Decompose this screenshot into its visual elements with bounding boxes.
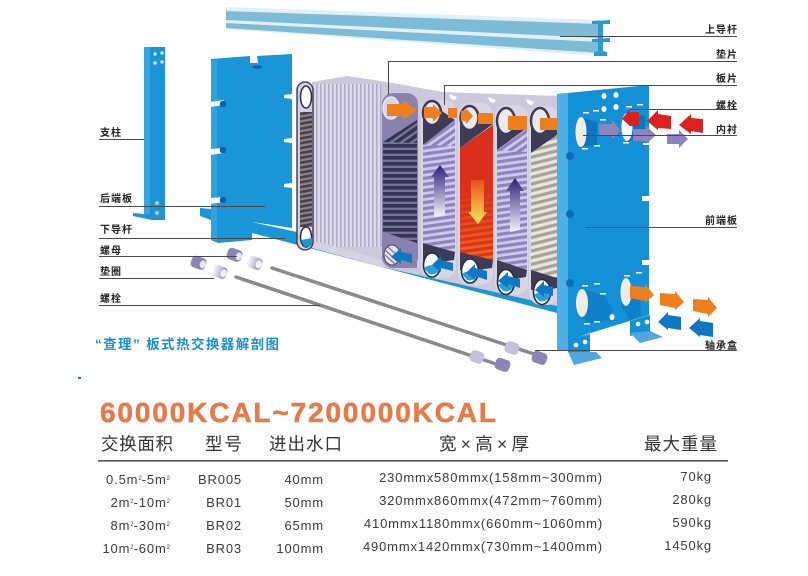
table row 3 bbox=[111, 515, 712, 533]
tie bolts bbox=[236, 268, 549, 373]
table row 1: 2 bbox=[138, 476, 142, 482]
labels left: 螺栓 bbox=[100, 292, 122, 305]
table header: 宽 × 高 × 厚 bbox=[439, 434, 529, 454]
table row 4 bbox=[102, 538, 712, 556]
labels left: 螺母 bbox=[100, 244, 122, 257]
table row 4: 490mmx1420mmx(730mm~1400mm) bbox=[363, 539, 603, 554]
table row 1: -5m bbox=[142, 472, 167, 487]
labels right: 前端板 bbox=[705, 214, 738, 227]
table row 4: 2 bbox=[167, 545, 171, 551]
orange inlet arrows through plates bbox=[387, 100, 557, 130]
plate 4: purple bbox=[495, 105, 528, 295]
table row 1: 2 bbox=[167, 476, 171, 482]
labels left: 支柱 bbox=[100, 126, 122, 139]
labels left: 下导杆 bbox=[100, 223, 133, 236]
table row 3: 590kg bbox=[672, 515, 712, 530]
table row 2 bbox=[111, 492, 712, 510]
blue outlet arrows through plates bbox=[391, 248, 553, 297]
plate 2: purple bbox=[421, 100, 456, 278]
tiny speck bbox=[78, 377, 81, 379]
table row 2: 320mmx860mmx(472mm~760mm) bbox=[379, 493, 603, 508]
table row 3: 8m bbox=[111, 518, 130, 533]
support column bbox=[133, 47, 165, 220]
table row 2: 2 bbox=[130, 499, 134, 505]
lower guide rail bbox=[252, 222, 557, 313]
labels right: 垫片 bbox=[716, 48, 738, 61]
title: 60000KCAL~7200000KCAL bbox=[100, 397, 496, 428]
table row 4: -60m bbox=[134, 541, 167, 556]
front end plate bbox=[557, 85, 649, 350]
table row 2: 2 bbox=[167, 499, 171, 505]
table header bbox=[98, 434, 728, 462]
labels right: 轴承盒 bbox=[705, 339, 738, 352]
labels left: 垫圈 bbox=[100, 265, 122, 278]
table header: 最大重量 bbox=[644, 434, 717, 454]
table row 1 bbox=[106, 469, 712, 487]
upper guide rail bbox=[226, 7, 610, 56]
table header: 型号 bbox=[205, 434, 242, 454]
labels left bbox=[100, 126, 133, 305]
vertical flow arrows bbox=[431, 165, 524, 232]
table row 4: 100mm bbox=[276, 541, 324, 556]
purple outlet arrows bbox=[599, 120, 688, 148]
diagram caption: “查理” 板式热交换器解剖图 bbox=[95, 336, 279, 352]
table row 3: 65mm bbox=[284, 518, 324, 533]
table row 1: 70kg bbox=[680, 469, 712, 484]
table header: 进出水口 bbox=[269, 434, 342, 454]
plate 5: grey bbox=[529, 106, 559, 305]
table row 3: -30m bbox=[134, 518, 167, 533]
labels right: 板片 bbox=[716, 72, 738, 85]
orange outlet arrows bbox=[630, 284, 717, 317]
mounting feet bbox=[568, 315, 663, 365]
table row 3: 2 bbox=[130, 522, 134, 528]
loose nuts and washers bbox=[189, 247, 264, 280]
plate pack body bbox=[297, 76, 557, 306]
table row 1: BR005 bbox=[198, 472, 242, 487]
table row 1: 230mmx580mmx(158mm~300mm) bbox=[379, 470, 603, 485]
table row 1: 40mm bbox=[284, 472, 324, 487]
table row 3: 410mmx1180mmx(660mm~1060mm) bbox=[364, 516, 603, 531]
table header: 交换面积 bbox=[101, 434, 173, 454]
table row 3: 2 bbox=[167, 522, 171, 528]
table row 2: BR01 bbox=[206, 495, 242, 510]
labels right: 螺栓 bbox=[716, 99, 738, 112]
table row 2: 2m bbox=[111, 495, 130, 510]
plate 3: red bbox=[458, 103, 493, 285]
table row 2: -10m bbox=[134, 495, 167, 510]
table row 4: BR03 bbox=[206, 541, 242, 556]
red inlet arrows bbox=[622, 109, 703, 134]
table row 4: 1450kg bbox=[664, 538, 712, 553]
blue inlet arrows bbox=[658, 312, 713, 337]
table row 2: 280kg bbox=[672, 492, 712, 507]
leader lines bbox=[99, 36, 737, 350]
rear end plate bbox=[200, 54, 292, 243]
table row 4: 10m bbox=[102, 541, 130, 556]
labels right: 内衬 bbox=[716, 123, 738, 136]
table row 2: 50mm bbox=[284, 495, 324, 510]
labels right: 上导杆 bbox=[705, 23, 738, 36]
labels right bbox=[705, 23, 738, 352]
plate 1: dark bbox=[382, 93, 418, 268]
table row 3: BR02 bbox=[206, 518, 242, 533]
table row 1: 0.5m bbox=[106, 472, 138, 487]
table row 4: 2 bbox=[130, 545, 134, 551]
labels left: 后端板 bbox=[100, 192, 133, 205]
